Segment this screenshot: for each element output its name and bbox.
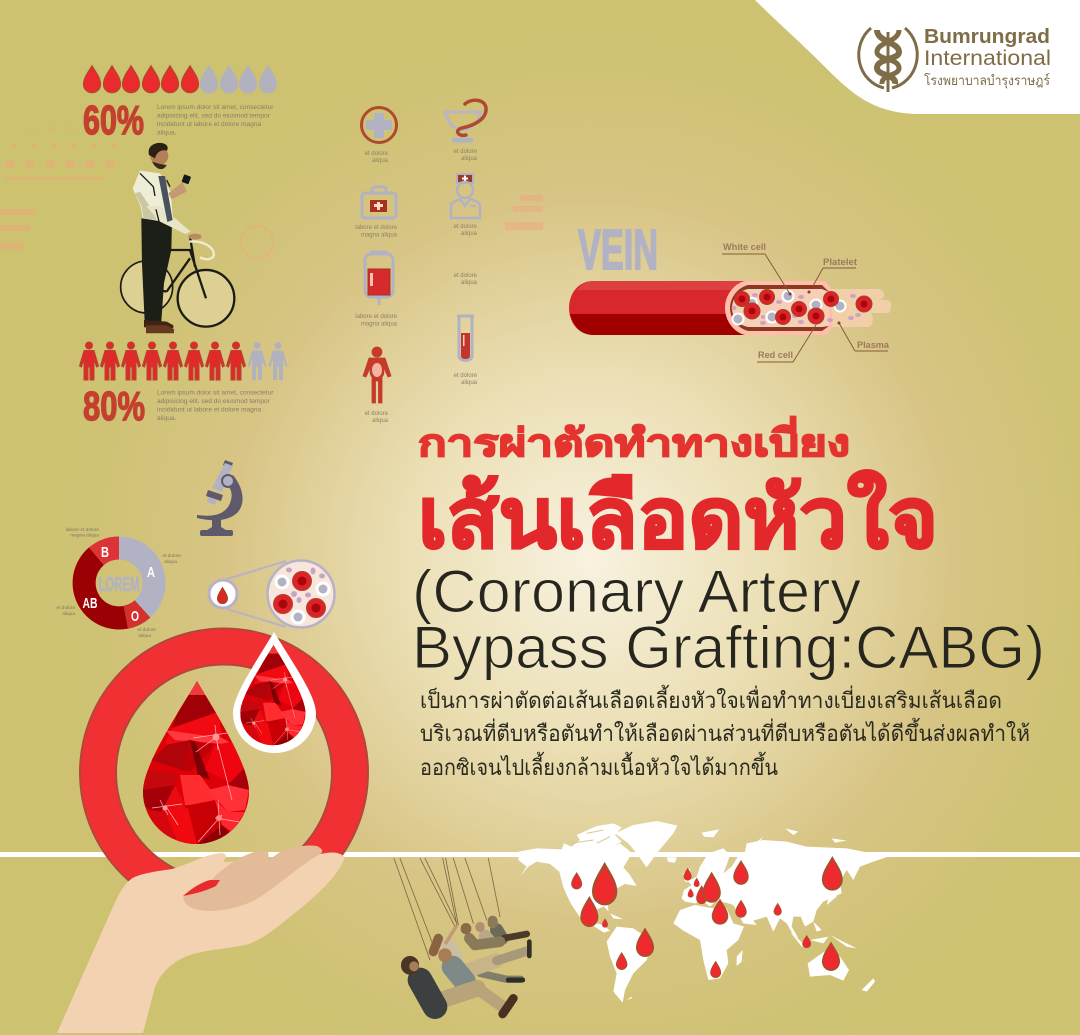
stat 80% description: incididunt ut labore et dolore magna (157, 406, 261, 414)
label: bag: magna aliqua (361, 232, 398, 238)
label: empty slot: et dolore (454, 273, 478, 279)
vein heading: VEIN (578, 218, 658, 282)
icon: human body (363, 347, 391, 403)
label: white cell: White cell (723, 242, 766, 252)
label: test tube: aliqua (461, 380, 478, 386)
plasma stream (810, 289, 891, 327)
icon: first aid bag (362, 187, 396, 218)
vein diagram (569, 242, 891, 362)
label: red cell: Red cell (758, 350, 793, 360)
world map with blood drops (518, 821, 888, 1003)
logo panel (755, 0, 1080, 114)
vessel wall (569, 281, 790, 335)
small faceted blood drop (233, 632, 316, 753)
red ring (98, 646, 350, 898)
people pictogram row 80% (80, 342, 288, 380)
icon: nurse (451, 174, 480, 218)
donut callouts (56, 527, 181, 639)
stat 60% description: Lorem ipsum dolor sit amet, consectetur (157, 104, 274, 111)
donut callouts: labore et dolore (66, 527, 99, 533)
logo name: Bumrungrad (924, 25, 1050, 48)
donut segment labels (82, 544, 155, 625)
map drops (572, 858, 842, 977)
donut segment labels: A (147, 564, 155, 581)
logo subtitle: International (924, 47, 1051, 70)
stat 80% description: Lorem ipsum dolor sit amet, consectetur (157, 390, 274, 396)
label: nurse: aliqua (461, 231, 478, 237)
label: bag: labore et dolore (355, 225, 398, 231)
label: bowl: aliqua (461, 156, 478, 162)
label: human body: aliqua (372, 418, 389, 424)
stat 80%: 80% (83, 383, 145, 429)
donut center label: LOREM (98, 574, 140, 596)
label: test tube: et dolore (454, 373, 478, 379)
donut chart: blood types (56, 527, 181, 639)
donut callouts: et dolore (162, 553, 181, 559)
white cells (732, 290, 846, 324)
stat 60%: 60% (83, 97, 144, 143)
label: empty slot: aliqua (461, 280, 478, 286)
hand holding ring (57, 845, 345, 1033)
drop pictogram row 60% (84, 65, 277, 94)
title English line 1: (Coronary Artery (412, 558, 861, 625)
label: nurse: et dolore (454, 224, 478, 230)
donut callouts: et dolore (56, 605, 75, 611)
photo: man with bicycle (121, 143, 234, 333)
donut segment labels: B (101, 544, 109, 561)
description paragraph: บริเวณที่ตีบหรือตันทำให้เลือดผ่านส่วนที่ตีบหรือตันได้ดีขึ้นส่งผลทำให้ (420, 718, 1030, 746)
icon: medical cross (362, 108, 396, 142)
icon: microscope (197, 460, 243, 536)
stat 80% description: aliqua. (157, 415, 176, 422)
label: human body: et dolore (365, 411, 389, 417)
landmasses (518, 821, 888, 1003)
description paragraph: ออกซิเจนไปเลี้ยงกล้ามเนื้อหัวใจได้มากขึ้น (420, 752, 778, 780)
stat 60% description: adipisicing elit, sed do eiusmod tempor (157, 112, 271, 120)
donut callouts: aliqua (164, 559, 177, 565)
logo emblem (859, 28, 917, 92)
icon: test tube (457, 316, 474, 360)
description paragraph: เป็นการผ่าตัดต่อเส้นเลือดเลี้ยงหัวใจเพื่อทำทางเบี่ยงเสริมเส้นเลือด (420, 685, 1002, 713)
stat 60% description: incididunt ut labore et dolore magna (157, 121, 261, 128)
title English line 2: Bypass Grafting:CABG) (412, 614, 1045, 681)
label: cross: aliqua (372, 158, 389, 164)
icon: bowl of hygieia (445, 100, 486, 140)
stat 80% description: adipisicing elit, sed do eiusmod tempor (157, 398, 271, 405)
icon: blood bag (365, 252, 393, 305)
label: blood bag: magna aliqua (361, 322, 398, 328)
icon grid (355, 100, 486, 424)
description paragraph (420, 685, 1030, 780)
vessel cutaway (725, 281, 832, 335)
red cells (734, 290, 872, 324)
label: bowl: et dolore (454, 149, 478, 155)
callout lines (722, 254, 888, 362)
label: cross: et dolore (365, 151, 389, 157)
donut segment labels: AB (82, 595, 98, 612)
title Thai line 1: การผ่าตัดทำทางเบี่ยง (418, 416, 850, 465)
donut callouts: aliqua (138, 633, 151, 639)
magnifier: blood cell zoom (209, 560, 334, 628)
stat 60% description: aliqua. (157, 130, 176, 136)
donut segment labels: O (131, 608, 139, 625)
label: platelet: Platelet (823, 257, 857, 267)
label: plasma: Plasma (857, 340, 890, 350)
donut callouts: magna aliqua (70, 532, 99, 538)
large faceted blood drop (140, 678, 252, 848)
donut callouts: aliqua (62, 611, 75, 617)
logo Thai name: โรงพยาบาลบำรุงราษฎร์ (924, 72, 1050, 89)
white horizon line (0, 852, 1080, 857)
platelets (732, 291, 861, 325)
donut callouts: et dolore (137, 627, 156, 633)
title Thai line 2: เส้นเลือดหัวใจ (418, 470, 938, 565)
photo: people on swings (394, 858, 529, 1014)
label: blood bag: labore et dolore (355, 314, 398, 320)
